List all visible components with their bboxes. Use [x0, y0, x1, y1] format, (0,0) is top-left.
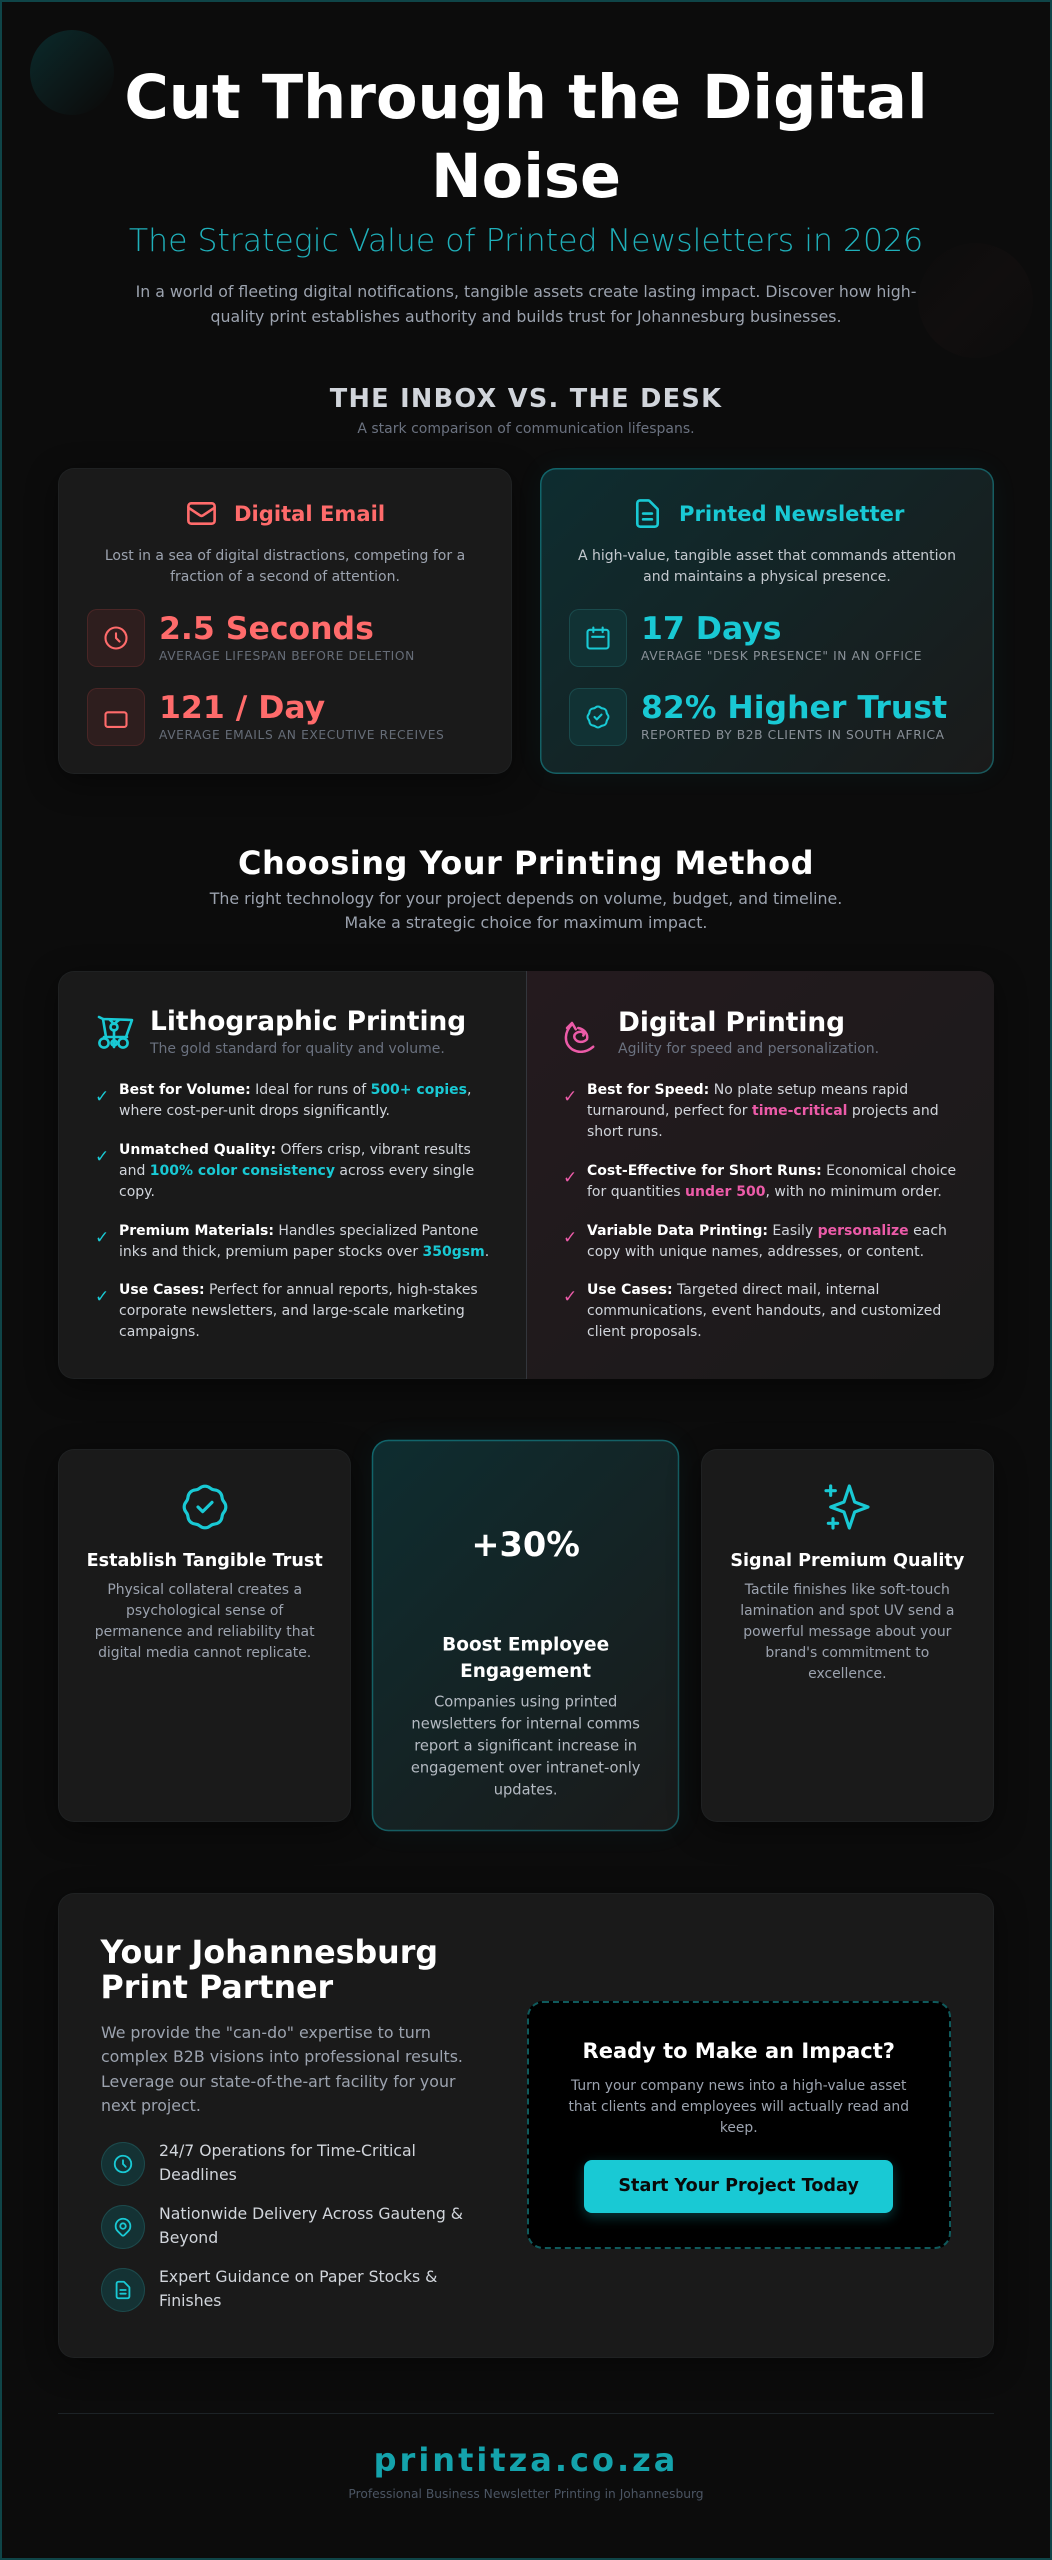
list item: where cost-per-unit drops significantly. [119, 1103, 390, 1119]
list item: campaigns. [119, 1324, 200, 1340]
card description: psychological sense of [126, 1602, 283, 1618]
feature text: Nationwide Delivery Across Gauteng & [159, 2204, 463, 2223]
feature text: Expert Guidance on Paper Stocks & [159, 2267, 437, 2286]
card description: Tactile finishes like soft-touch [745, 1582, 950, 1598]
partner heading: Your Johannesburg [100, 1935, 438, 1971]
icon: document [101, 2268, 145, 2312]
title: Cut Through the Digital [124, 63, 928, 133]
stat value: 2.5 Seconds [159, 611, 374, 647]
intro text: In a world of fleeting digital notifications, tangible assets create lasting impact. Discover how high- [136, 282, 916, 301]
card description: Physical collateral creates a [107, 1582, 302, 1598]
list item: copy with unique names, addresses, or content. [587, 1244, 924, 1260]
partner description: next project. [101, 2096, 201, 2115]
card heading: Printed Newsletter [679, 501, 904, 526]
card description: fraction of a second of attention. [170, 569, 400, 585]
partner description: We provide the "can-do" expertise to turn [101, 2023, 431, 2042]
check: ✓ [563, 1228, 577, 1248]
column subheading: Agility for speed and personalization. [618, 1041, 879, 1057]
list item [587, 1223, 947, 1260]
list item [587, 1282, 941, 1340]
stat label: AVERAGE LIFESPAN BEFORE DELETION [159, 649, 415, 663]
partner heading: Print Partner [100, 1970, 333, 2006]
panel: printed newsletter [540, 468, 994, 774]
list item: Premium Materials: Handles specialized Pantone [119, 1223, 478, 1239]
decorative glow: teal circle [30, 30, 114, 115]
cta description [568, 2078, 909, 2136]
check: ✓ [563, 1087, 577, 1107]
feature text: Deadlines [159, 2165, 237, 2184]
call to action box [526, 2001, 951, 2249]
column: digital [563, 1006, 956, 1340]
list item [587, 1163, 956, 1200]
partner heading [100, 1935, 438, 2006]
partner description: Leverage our state-of-the-art facility for your [101, 2072, 455, 2091]
cta description: keep. [720, 2120, 758, 2136]
card description: newsletters for internal comms [412, 1716, 640, 1733]
card heading: Signal Premium Quality [730, 1551, 964, 1571]
list item: Variable Data Printing: Easily personalize each [587, 1223, 947, 1239]
list item [119, 1282, 478, 1340]
panel: digital tint [526, 971, 994, 1379]
card description: report a significant increase in [415, 1738, 637, 1755]
feature text: 24/7 Operations for Time-Critical [159, 2141, 416, 2160]
icon: litho press [98, 1016, 134, 1049]
button: Start Your Project Today [618, 2176, 859, 2196]
list item: Best for Volume: Ideal for runs of 500+ copies, [119, 1082, 471, 1098]
icon: badge check [182, 1484, 228, 1530]
icon: badge check [569, 688, 627, 746]
section description: Make a strategic choice for maximum impact. [345, 913, 707, 932]
title: Noise [431, 142, 621, 212]
list item: corporate newsletters, and large-scale marketing [119, 1303, 465, 1319]
check: ✓ [95, 1147, 109, 1167]
icon: digital swirl [564, 1022, 594, 1053]
column heading: Lithographic Printing [150, 1006, 466, 1037]
card description: permanence and reliability that [95, 1624, 315, 1640]
icon: clock [101, 2142, 145, 2186]
cta heading: Ready to Make an Impact? [583, 2039, 895, 2063]
list item [119, 1142, 474, 1200]
card description [740, 1582, 954, 1682]
section description [210, 889, 842, 932]
title [124, 63, 928, 212]
icon: inbox [87, 688, 145, 746]
panel: tangible trust [58, 1449, 351, 1822]
stat label: REPORTED BY B2B CLIENTS IN SOUTH AFRICA [641, 728, 945, 742]
list item: short runs. [587, 1124, 663, 1140]
list item: Best for Speed: No plate setup means rapid [587, 1082, 908, 1098]
intro text: quality print establishes authority and builds trust for Johannesburg businesses. [210, 307, 842, 326]
column subheading: The gold standard for quality and volume. [150, 1041, 445, 1057]
column: lithographic [95, 1006, 489, 1340]
card description: lamination and spot UV send a [740, 1602, 954, 1618]
list item: Cost-Effective for Short Runs: Economical choice [587, 1163, 956, 1179]
check: ✓ [95, 1228, 109, 1248]
card description: updates. [494, 1782, 558, 1799]
section description: The right technology for your project depends on volume, budget, and timeline. [210, 889, 842, 908]
list item: for quantities under 500, with no minimum order. [587, 1184, 942, 1200]
button [584, 2160, 893, 2213]
stat label: AVERAGE EMAILS AN EXECUTIVE RECEIVES [159, 728, 444, 742]
list item: Use Cases: Perfect for annual reports, high-stakes [119, 1282, 478, 1298]
icon: sparkles [824, 1484, 870, 1530]
icon: envelope [187, 502, 216, 525]
card description: engagement over intranet-only [411, 1760, 641, 1777]
list item: Use Cases: Targeted direct mail, internal [587, 1282, 879, 1298]
feature text [159, 2204, 463, 2247]
card description [105, 548, 465, 585]
panel: print partner [58, 1893, 994, 2358]
stat value: 121 / Day [159, 690, 325, 726]
icon: document [636, 499, 659, 528]
stat label: AVERAGE "DESK PRESENCE" IN AN OFFICE [641, 649, 922, 663]
card description: and maintains a physical presence. [643, 569, 891, 585]
card heading: Digital Email [234, 501, 385, 526]
check: ✓ [95, 1287, 109, 1307]
list item: client proposals. [587, 1324, 702, 1340]
card heading: Boost Employee [443, 1635, 609, 1656]
stat value: 17 Days [641, 611, 782, 647]
partner description: complex B2B visions into professional results. [101, 2047, 463, 2066]
card description: excellence. [808, 1666, 887, 1682]
list item [119, 1082, 471, 1119]
footer brand: printitza.co.za [374, 2441, 678, 2479]
list item: Unmatched Quality: Offers crisp, vibrant results [119, 1142, 471, 1158]
decorative glow: pink circle [918, 243, 1033, 358]
card heading: Establish Tangible Trust [87, 1551, 323, 1571]
check: ✓ [95, 1087, 109, 1107]
partner description [101, 2023, 463, 2115]
section subheading: A stark comparison of communication lifespans. [357, 421, 695, 437]
card description: digital media cannot replicate. [98, 1644, 311, 1660]
section heading: inbox vs desk: THE INBOX VS. THE DESK [330, 384, 722, 414]
feature text: Finishes [159, 2291, 221, 2310]
feature text [159, 2141, 416, 2184]
footer divider [58, 2413, 994, 2414]
section heading: printing method: Choosing Your Printing Method [238, 844, 814, 882]
big stat: +30% [472, 1524, 580, 1564]
card description: powerful message about your [743, 1624, 951, 1640]
icon: clock [87, 609, 145, 667]
list item: communications, event handouts, and customized [587, 1303, 941, 1319]
icon: location pin [101, 2205, 145, 2249]
card heading [443, 1635, 609, 1682]
card description: A high-value, tangible asset that commands attention [578, 548, 956, 564]
check: ✓ [563, 1287, 577, 1307]
cta description: Turn your company news into a high-value asset [571, 2078, 906, 2094]
list item: and 100% color consistency across every single [119, 1163, 474, 1179]
intro text [136, 282, 916, 326]
list item: copy. [119, 1184, 155, 1200]
icon: calendar [569, 609, 627, 667]
subtitle: The Strategic Value of Printed Newsletters in 2026 [129, 222, 923, 258]
card heading: Engagement [460, 1661, 591, 1682]
panel: employee engagement [372, 1440, 680, 1831]
feature text [159, 2267, 437, 2310]
card description [95, 1582, 315, 1660]
panel: premium quality [701, 1449, 994, 1822]
check: ✓ [563, 1168, 577, 1188]
card description [411, 1694, 641, 1799]
column heading: Digital Printing [618, 1006, 845, 1038]
card description: Lost in a sea of digital distractions, competing for a [105, 548, 465, 564]
panel: printing comparison [58, 971, 994, 1379]
cta description: that clients and employees will actually read and [568, 2098, 909, 2114]
feature text: Beyond [159, 2228, 218, 2247]
list item [587, 1082, 939, 1140]
list item: inks and thick, premium paper stocks over 350gsm. [119, 1244, 489, 1260]
stat value: 82% Higher Trust [641, 690, 947, 726]
panel: digital email [58, 468, 512, 774]
footer tagline: Professional Business Newsletter Printing in Johannesburg [348, 2487, 704, 2501]
card description: brand's commitment to [765, 1644, 929, 1660]
list item [119, 1223, 489, 1260]
card description: Companies using printed [434, 1694, 618, 1711]
list item: turnaround, perfect for time-critical projects and [587, 1103, 939, 1119]
card description [578, 548, 956, 585]
